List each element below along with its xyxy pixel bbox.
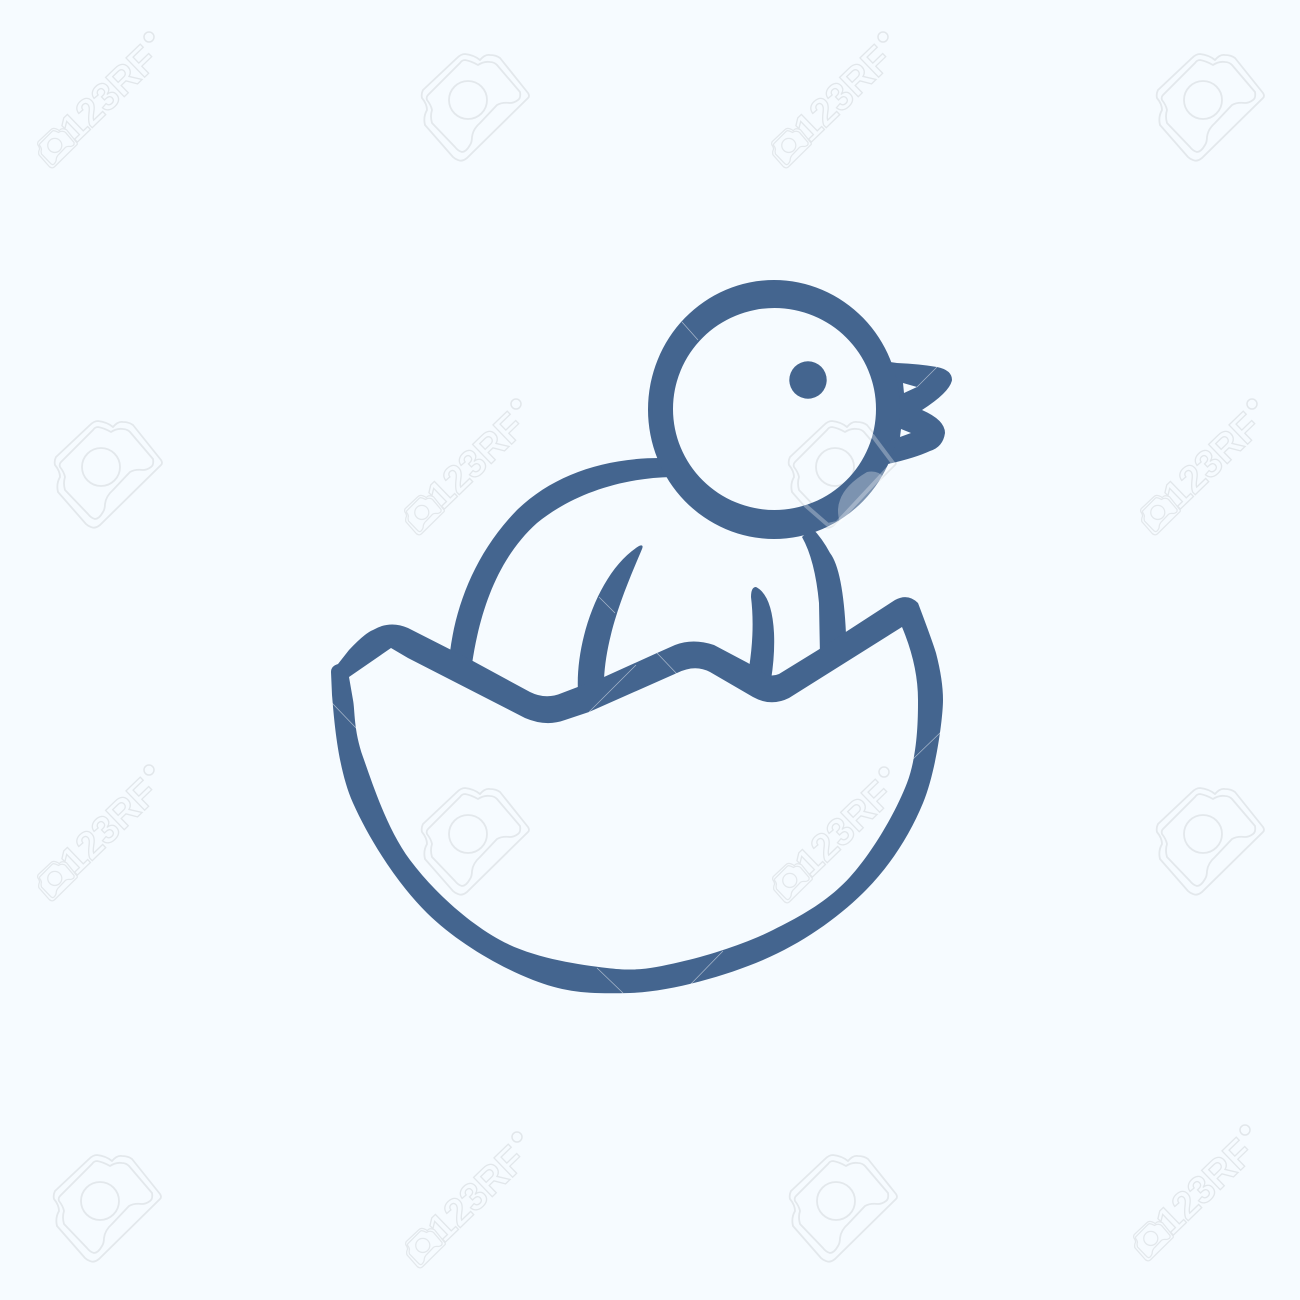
watermarks: 123RF: [52, 771, 166, 883]
watermarks: 123RF: [787, 773, 901, 885]
watermarks: 123RF: [420, 1138, 534, 1250]
chick and egg drawing: [331, 280, 952, 993]
egg shell: [331, 597, 943, 993]
watermarks: 123RF: [1155, 405, 1269, 517]
watermark tile seams: [332, 322, 942, 993]
wing: [578, 545, 643, 692]
chick body outline: [450, 458, 672, 664]
feather: [749, 587, 774, 680]
eye: [789, 361, 827, 399]
watermarks: 123RF: [419, 405, 533, 517]
chick head: [648, 280, 900, 539]
watermark glare over head: [805, 435, 893, 525]
watermarks: 123RF: [786, 38, 900, 150]
beak: [888, 362, 952, 464]
watermarks: 123RF: [1148, 1131, 1262, 1243]
chick neck and chest: [802, 528, 846, 656]
watermarks: 123RF: [52, 38, 166, 150]
